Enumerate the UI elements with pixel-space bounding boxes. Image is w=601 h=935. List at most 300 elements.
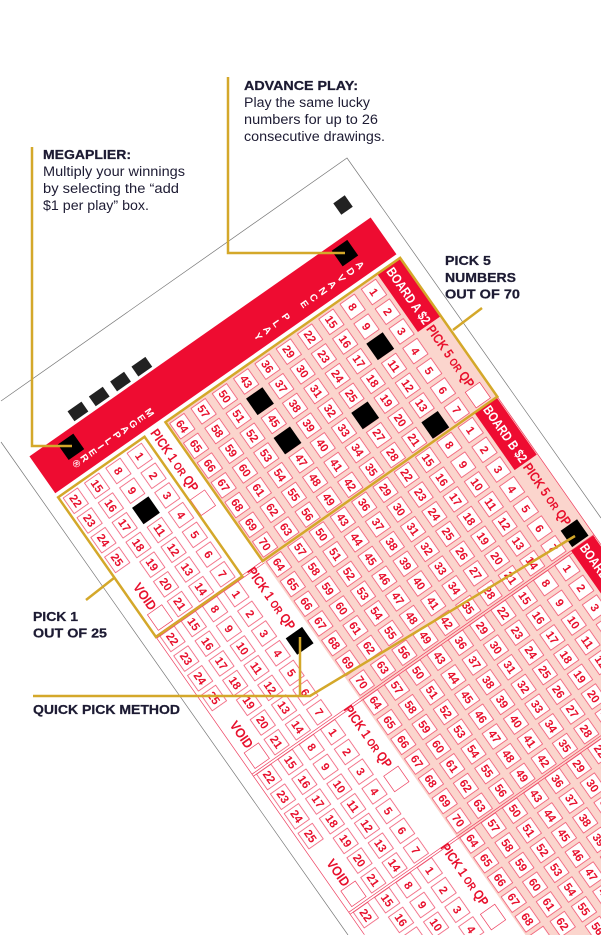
board B pick 1 number grid: 7 <box>311 707 325 719</box>
callout line: advance play <box>228 77 345 253</box>
board C pick 5 number grid: 26 <box>549 684 566 701</box>
board A pick 5 number grid: 47 <box>292 452 309 469</box>
board D pick 5 number grid: 50 <box>506 803 523 820</box>
board B pick 5 number grid: 56 <box>395 644 412 662</box>
board C pick 1 number grid: 25 <box>301 828 319 846</box>
board C pick 5 number grid: 9 <box>552 597 566 609</box>
board A pick 5 number grid: 15 <box>322 314 339 332</box>
board B pick 5 number grid: 12 <box>495 516 512 533</box>
board C pick 1 number grid: 15 <box>281 754 299 772</box>
board A void label: VOID <box>130 580 160 613</box>
board D pick 5 number grid: 58 <box>498 837 516 855</box>
board C pick 1 number grid: 2 <box>339 746 353 759</box>
board C pick 5 number grid: 17 <box>543 629 560 647</box>
board B pick 5 number grid: 36 <box>355 497 372 514</box>
board A pick 5 number grid: 2 <box>380 306 394 318</box>
board A pick 5 number grid: 5 <box>421 365 435 378</box>
board A pick 5 number grid: 38 <box>286 398 303 416</box>
board A pick 5 number grid: 20 <box>391 412 408 429</box>
board A pick 5 label: PICK 5 OR QP <box>423 322 477 391</box>
board D pick 5 number grid: 61 <box>539 896 557 914</box>
board C pick 5 number grid: 31 <box>500 659 518 677</box>
advance play stacked label: Y <box>251 331 264 343</box>
board B pick 5 number grid: 7 <box>546 543 559 555</box>
board B pick 5 number grid: 44 <box>347 531 365 549</box>
board A pick 5 number grid: 18 <box>363 373 381 391</box>
board C pick 5 number grid: 22 <box>494 605 511 622</box>
board D pick 1 number grid: 15 <box>378 892 395 910</box>
board B QP box marked <box>561 519 589 547</box>
board C pick 1 number grid: 1 <box>325 727 339 739</box>
board D pick 5 number grid: 30 <box>583 778 600 795</box>
board C tag <box>571 535 601 608</box>
board A pick 5 number grid: 69 <box>242 516 259 534</box>
board A pick 5 number grid: 67 <box>214 477 231 495</box>
board A pick 5 number grid: 66 <box>200 457 218 475</box>
board B pick 5 number grid: 54 <box>367 605 385 623</box>
board C pick 5 number grid: 24 <box>522 644 539 662</box>
board B pick 5 number grid: 31 <box>404 521 421 539</box>
board C pick 5 number grid: 25 <box>535 664 553 682</box>
board C pick 5 number grid: 47 <box>485 728 502 746</box>
advance play stacked label: A <box>260 324 273 337</box>
board A pick 1 QP box <box>190 490 216 516</box>
red header banner <box>29 217 396 493</box>
board D pick 5 number grid <box>455 734 601 935</box>
callout text: megaplier: MEGAPLIER: <box>43 147 131 162</box>
board A pick 5 number grid: 36 <box>258 359 275 376</box>
board C pick 5 number grid: 62 <box>456 778 474 795</box>
board D pick 5 number grid: 64 <box>463 832 480 850</box>
board C pick 5 number grid: 53 <box>450 724 467 741</box>
board C pick 5 number grid: 45 <box>458 689 475 707</box>
megaplier stacked label: M <box>142 407 156 420</box>
callout text: pick 1 <box>33 609 107 640</box>
callout text: advance play: consecutive drawings. <box>244 129 385 144</box>
board C pick 5 number grid: 68 <box>421 773 439 791</box>
board A pick 5 number grid: 30 <box>293 363 310 381</box>
board A pick 5 number grid: 4 <box>408 346 421 358</box>
board A pick 5 number grid: 52 <box>243 428 260 445</box>
board A pick 1 number grid: 6 <box>201 549 214 561</box>
board B pick 1 number grid: 19 <box>239 695 257 712</box>
board B pick 5 number grid: 1 <box>463 425 477 437</box>
board D <box>348 733 601 935</box>
board D pick 1 number grid: 9 <box>415 900 428 912</box>
board B pick 5 number grid: 24 <box>425 506 442 524</box>
board A pick 5 number grid: 25 <box>342 388 359 406</box>
board B pick 5 label: PICK 5 OR QP <box>520 460 574 529</box>
board A pick 5 number grid: 28 <box>383 447 401 465</box>
board A pick 5 number grid: 62 <box>263 502 280 519</box>
board D pick 1 number grid <box>348 853 489 935</box>
board A pick 5 number grid: 27 <box>369 427 387 444</box>
board A pick 5 number grid: 17 <box>349 353 367 370</box>
board A pick 5 number grid: 3 <box>394 326 407 338</box>
board B pick 5 number grid: 10 <box>467 476 485 494</box>
board C pick 5 number grid: 54 <box>464 743 481 761</box>
board C pick 1 number grid: 23 <box>274 789 291 806</box>
board C pick 5 number grid: 55 <box>478 763 495 781</box>
board B pick 5 number grid: 40 <box>410 575 427 593</box>
board C pick 1 number grid: 7 <box>408 845 422 857</box>
board C pick 1 number grid <box>252 715 433 912</box>
board C pick 1 number grid: 10 <box>330 778 347 796</box>
board B pick 1 QP box marked <box>286 627 314 655</box>
advance play stacked label: D <box>343 266 357 278</box>
board B pick 5 number grid: 39 <box>396 556 413 573</box>
advance play stacked label: C <box>306 292 320 304</box>
board B pick 1 number grid: 21 <box>267 734 284 752</box>
advance play stacked label: V <box>334 273 347 285</box>
board A pick 1 number grid: 16 <box>101 497 119 515</box>
board C pick 1 number grid: 18 <box>322 813 340 831</box>
board B pick 5 number grid: 60 <box>332 600 349 618</box>
board A pick 5 number grid: 39 <box>299 417 316 435</box>
callout text: advance play: numbers for up to 26 <box>244 112 378 127</box>
board B pick 5 number grid: 68 <box>325 635 342 653</box>
board B pick 5 number grid: 25 <box>439 526 456 544</box>
board A pick 1 number grid: 13 <box>178 561 195 579</box>
board D pick 5 number grid: 51 <box>519 822 537 840</box>
board C pick 1 number grid: 12 <box>357 818 375 835</box>
board D pick 5 number grid: 55 <box>574 901 592 919</box>
callout text: pick 1: OUT OF 25 <box>33 626 107 640</box>
board A pick 1 number grid: 19 <box>143 556 160 574</box>
board B pick 5 number grid: 45 <box>361 551 378 569</box>
board B pick 5 number grid: 20 <box>487 550 505 568</box>
board B pick 5 number grid: 9 <box>456 459 469 471</box>
board B pick 1 number grid: 8 <box>207 604 221 616</box>
board D pick 1 number grid: 22 <box>356 907 374 924</box>
board A pick 5 number grid: 33 <box>334 422 352 440</box>
board B pick 5 number grid: 48 <box>402 610 420 628</box>
board A pick 5 number grid: 43 <box>237 373 254 391</box>
callout text: pick 5 numbers: NUMBERS <box>445 270 516 285</box>
small timing marks <box>68 357 152 421</box>
board C pick 5 number grid: 11 <box>578 634 595 652</box>
advance play stacked label: A <box>325 279 338 291</box>
board C pick 5 number grid: 46 <box>471 709 489 726</box>
board A pick 5 number grid: 23 <box>314 348 332 366</box>
board C pick 1 number grid: 17 <box>309 793 326 811</box>
board B pick 5 number grid: 69 <box>338 655 356 672</box>
board A pick 1 number grid: 14 <box>192 581 209 599</box>
board C pick 1 number grid: 4 <box>367 786 381 798</box>
callout text: pick 1: PICK 1 <box>33 609 78 624</box>
board D pick 5 number grid: 47 <box>582 866 599 884</box>
board C pick 1 number grid: 22 <box>260 769 277 786</box>
board A pick 1 number grid: 24 <box>94 532 111 550</box>
board B pick 5 number grid: 64 <box>270 556 287 574</box>
board C pick 5 number grid: 50 <box>409 665 426 682</box>
board B pick 5 number grid: 14 <box>523 555 540 573</box>
board B pick 5 number grid: 35 <box>459 600 476 618</box>
board A pick 1 number grid: 7 <box>215 569 228 581</box>
board A pick 1 number grid: 2 <box>146 470 159 482</box>
board C pick 5 number grid: 43 <box>430 650 447 667</box>
callout line: pick 1 <box>86 578 114 600</box>
board A pick 5 number grid: 12 <box>398 377 415 395</box>
board D pick 5 number grid: 60 <box>526 877 543 894</box>
board B pick 5 number grid: 29 <box>376 482 393 499</box>
board A pick 5 number grid: 49 <box>319 491 336 509</box>
board A pick 5 number grid <box>165 275 474 562</box>
board B pick 1 number grid: 22 <box>163 631 180 648</box>
board B pick 5 number grid: 52 <box>340 566 357 583</box>
megaplier stacked label: R <box>77 452 91 465</box>
board A tag: BOARD A $2 <box>383 265 434 327</box>
board A pick 1 number grid: 15 <box>88 478 105 496</box>
board C <box>251 535 601 912</box>
board C pick 5 number grid: 38 <box>479 674 496 692</box>
board B pick 1 number grid: 13 <box>274 699 292 717</box>
callout text: megaplier: by selecting the “add <box>43 181 179 196</box>
board C pick 1 number grid: 21 <box>364 872 381 890</box>
board C pick 5 number grid: 63 <box>470 797 487 815</box>
board A pick 5 number grid: 34 <box>348 442 366 460</box>
board A void box <box>147 605 173 630</box>
board C pick 5 number grid: 3 <box>587 602 601 614</box>
board C pick 5 number grid: 44 <box>444 669 461 687</box>
board C pick 5 number grid: 60 <box>429 738 446 756</box>
board B pick 5 number grid: 26 <box>452 545 470 563</box>
board A pick 1 label: PICK 1 OR QP <box>147 426 202 495</box>
board C pick 1 number grid: 13 <box>371 837 388 855</box>
callout text: advance play <box>244 78 385 144</box>
board A pick 5 number grid: 63 <box>277 521 294 539</box>
board D pick 1 number grid: 2 <box>436 885 449 897</box>
board A pick 5 number grid: 35 <box>362 462 379 479</box>
board C pick 5 number grid: 23 <box>508 625 525 642</box>
board C pick 5 number grid: 65 <box>380 714 398 732</box>
board A pick 5 number grid: 59 <box>222 443 239 460</box>
board B pick 5 number grid: 59 <box>318 581 336 598</box>
board A pick 1 number grid: 5 <box>187 529 201 542</box>
board B pick 5 number grid: 66 <box>297 596 314 613</box>
board B pick 5 number grid: 6 <box>532 523 545 535</box>
callout line: pick 5 numbers <box>453 308 482 330</box>
board B pick 1 number grid: 10 <box>233 640 250 658</box>
board A pick 5 number grid: 37 <box>272 378 289 396</box>
slip edge lines <box>58 258 601 935</box>
board B pick 5 number grid: 15 <box>419 452 436 470</box>
board D pick 1 number grid: 16 <box>392 912 409 929</box>
board C pick 1 number grid: 19 <box>336 833 353 850</box>
board A pick 5 QP box <box>465 382 491 408</box>
board B pick 5 number grid: 19 <box>474 531 491 548</box>
board C pick 5 number grid: 18 <box>557 649 574 667</box>
board B pick 5 number grid: 65 <box>283 576 301 594</box>
board B pick 5 number grid: 27 <box>466 565 483 582</box>
board B pick 5 number grid: 8 <box>442 440 456 452</box>
board B pick 5 number grid: 11 <box>481 496 499 514</box>
board B pick 1 label: PICK 1 OR QP <box>244 564 298 633</box>
board A pick 5 number grid: 1 <box>366 287 380 299</box>
board A pick 5 number grid: 70 <box>255 536 273 553</box>
board B pick 1 number grid: 11 <box>247 660 264 678</box>
advance play stacked label: P <box>279 312 292 324</box>
board B pick 1 number grid: 2 <box>243 608 256 621</box>
board C pick 5 number grid <box>358 551 601 838</box>
board B pick 5 number grid: 58 <box>305 561 322 579</box>
board B pick 1 number grid: 5 <box>284 667 298 680</box>
board A pick 5 number grid: 41 <box>327 457 344 475</box>
megaplier stacked label: G <box>126 418 139 431</box>
callout text: megaplier <box>43 147 185 213</box>
board A pick 5 number grid: 55 <box>284 487 302 504</box>
board A pick 5 number grid: 53 <box>257 447 274 465</box>
board A pick 5 number grid: 16 <box>336 333 353 351</box>
board D pick 5 number grid: 37 <box>562 792 579 810</box>
board A pick 5 number grid: 60 <box>235 462 253 480</box>
board C pick 5 number grid: 58 <box>401 699 419 717</box>
board B pick 1 number grid: 17 <box>212 655 229 673</box>
callout text: quick pick method: QUICK PICK METHOD <box>33 702 180 717</box>
board B pick 5 number grid: 28 <box>480 585 497 603</box>
board A pick 1 number grid: 23 <box>80 512 97 530</box>
board C pick 5 number grid: 41 <box>520 733 538 751</box>
board D pick 5 number grid: 52 <box>533 842 550 859</box>
board C pick 5 number grid: 34 <box>542 718 559 736</box>
board B pick 5 number grid: 57 <box>291 541 308 559</box>
board B pick 5 number grid: 33 <box>431 560 448 578</box>
board D pick 1 number grid: 3 <box>450 904 463 916</box>
board B pick 5 number grid: 70 <box>352 674 369 692</box>
board A pick 1 number grid: 17 <box>115 517 132 535</box>
board B pick 5 number grid: 3 <box>491 464 504 476</box>
advance play stacked label: A <box>353 260 366 272</box>
board C pick 5 number grid: 30 <box>486 639 504 657</box>
board C pick 1 number grid: 16 <box>295 774 312 791</box>
advance play stacked label: N <box>316 286 329 298</box>
board C pick 5 number grid: 66 <box>394 734 411 751</box>
board B pick 1 number grid: 1 <box>229 589 243 601</box>
board D pick 1 number grid: 10 <box>427 917 444 934</box>
board A pick 5 number grid: 50 <box>215 388 233 406</box>
board A pick 1 number grid: 8 <box>111 466 125 478</box>
board B pick 5 number grid: 4 <box>504 484 518 496</box>
board A pick 1 number grid <box>58 439 240 636</box>
board B void box <box>244 743 269 769</box>
board B pick 5 number grid: 18 <box>460 511 477 529</box>
board A pick 1 number grid: 3 <box>160 490 173 502</box>
board C pick 5 number grid: 32 <box>514 679 531 696</box>
board A pick 5 number grid: 54 <box>270 467 288 485</box>
board B pick 5 number grid: 5 <box>518 503 532 516</box>
board D pick 5 number grid: 45 <box>554 827 572 845</box>
board B pick 5 number grid: 23 <box>411 486 428 504</box>
board D pick 1 label: PICK 1 OR QP <box>438 841 492 909</box>
board A pick 5 number grid: 61 <box>249 482 267 500</box>
board D pick 5 number grid: 53 <box>547 862 564 879</box>
board A pick 1 number grid: 4 <box>173 510 187 522</box>
board A pick 5 number grid: 8 <box>345 301 359 314</box>
corner timing mark <box>333 195 353 215</box>
board B pick 5 number grid: 50 <box>312 526 329 544</box>
board B pick 5 number grid: 49 <box>416 629 433 647</box>
board B pick 5 number grid: 22 <box>397 467 414 484</box>
board C pick 5 number grid: 2 <box>574 582 587 595</box>
board A pick 1 number grid: 11 <box>150 522 168 539</box>
board A pick 5 number grid: 57 <box>194 403 211 421</box>
board C pick 5 number grid: 27 <box>563 703 580 721</box>
board C pick 5 number grid: 70 <box>449 812 466 830</box>
board B pick 5 number grid: 32 <box>417 541 434 558</box>
board A pick 5 number grid: 21 <box>405 432 422 450</box>
board C pick 5 number grid: 15 <box>515 590 533 608</box>
board C pick 1 number grid: 20 <box>350 852 367 870</box>
board A pick 5 number grid: 6 <box>435 385 449 397</box>
board B pick 1 number grid: 3 <box>256 628 270 640</box>
board D pick 1 number grid: 8 <box>401 880 415 892</box>
board D pick 5 number grid: 36 <box>548 773 565 790</box>
callout text: pick 5 numbers: OUT OF 70 <box>445 286 520 302</box>
board A pick 5 number grid: 7 <box>449 405 462 417</box>
board B pick 5 number grid: 30 <box>390 501 407 519</box>
gold frame: pick 1 <box>58 437 242 637</box>
board C pick 5 number grid: 20 <box>584 688 601 706</box>
board B pick 5 number grid: 42 <box>437 615 454 632</box>
board C pick 5 number grid: 59 <box>415 719 432 736</box>
board B pick 5 number grid: 51 <box>326 546 343 564</box>
board C pick 5 number grid: 37 <box>465 654 482 672</box>
board B pick 5 number grid: 67 <box>311 615 328 633</box>
board D pick 5 number grid: 67 <box>504 891 521 909</box>
advance play stacked label: L <box>270 318 282 330</box>
megaplier stacked label: E <box>134 413 147 425</box>
board A pick 1 number grid: 25 <box>108 552 125 570</box>
board C pick 1 number grid: 3 <box>353 766 367 778</box>
board A pick 5 number grid: 13 <box>412 397 429 415</box>
megaplier box <box>58 434 84 460</box>
board D pick 5 number grid: 46 <box>568 847 585 864</box>
board B pick 5 number grid <box>261 413 571 700</box>
board C pick 1 number grid: 8 <box>304 742 318 754</box>
board B pick 1 number grid: 9 <box>221 623 235 635</box>
board B pick 5 number grid: 62 <box>360 640 377 657</box>
callout text: pick 5 numbers: PICK 5 <box>445 253 491 268</box>
board D pick 5 number grid: 54 <box>561 881 578 899</box>
board A pick 5 number grid: 56 <box>298 506 315 524</box>
board A pick 5 number grid: 24 <box>328 368 346 386</box>
board B pick 1 number grid: 18 <box>226 675 243 693</box>
board C pick 5 number grid: 64 <box>366 694 384 712</box>
megaplier stacked label <box>69 407 156 471</box>
advance play stacked label: E <box>297 299 310 311</box>
board A pick 5 number grid: 68 <box>228 497 245 515</box>
advance play box <box>332 240 358 266</box>
board C pick 5 number grid: 56 <box>491 783 509 800</box>
board B pick 1 number grid: 14 <box>288 719 306 737</box>
board A <box>58 258 496 636</box>
board C pick 5 number grid: 28 <box>577 723 594 741</box>
board B pick 5 number grid: 17 <box>446 491 463 509</box>
board A pick 5 number grid: 9 <box>359 321 372 333</box>
board B pick 5 number grid: 41 <box>424 595 441 613</box>
board B <box>154 397 593 774</box>
board A pick 5 number grid: 31 <box>307 383 324 401</box>
board D pick 5 number grid: 43 <box>527 788 544 805</box>
board B pick 5 number grid: 43 <box>333 512 351 529</box>
board C pick 1 QP box <box>384 766 409 792</box>
board C pick 1 number grid: 11 <box>344 798 361 816</box>
board C pick 1 number grid: 24 <box>287 808 305 826</box>
board B pick 5 number grid: 38 <box>382 536 400 554</box>
board B pick 5 number grid: 37 <box>368 516 386 534</box>
board B pick 5 number grid: 34 <box>445 580 462 598</box>
board B tag: BOARD B $2 <box>480 403 530 465</box>
